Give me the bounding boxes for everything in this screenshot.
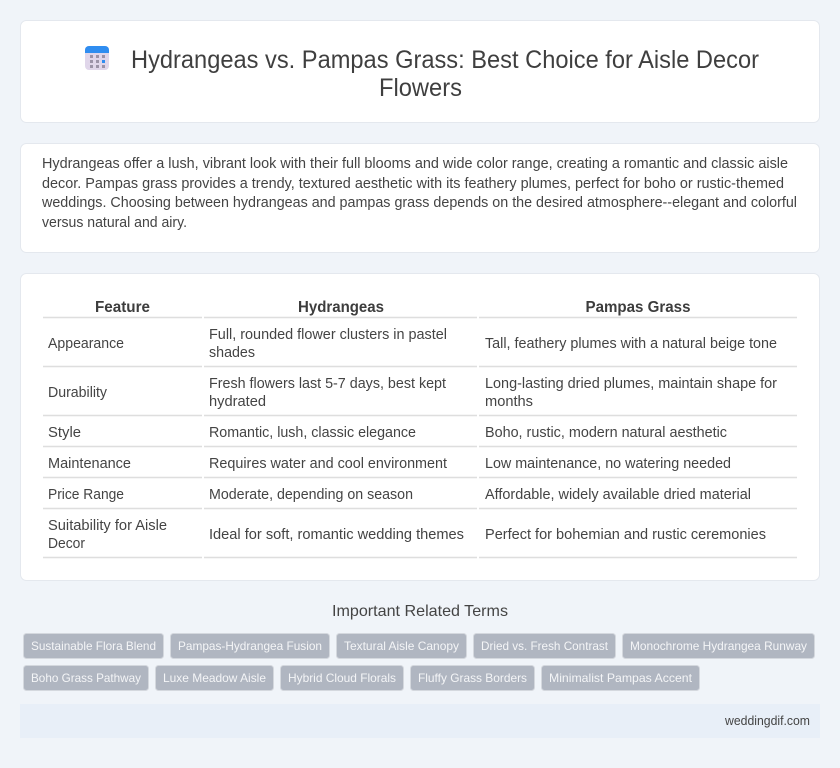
row: price range: Moderate, depending on season — [209, 487, 413, 503]
panel: comparison table — [20, 274, 820, 580]
row: durability — [48, 376, 777, 410]
text block: introduction — [41, 156, 797, 231]
row: suitability — [48, 518, 766, 552]
row: style: Style — [48, 425, 81, 441]
row: price range — [48, 487, 751, 503]
row: maintenance: Low maintenance, no watering needed — [485, 456, 731, 472]
row: durability: hydrated — [209, 394, 266, 410]
row: style: Boho, rustic, modern natural aesthetic — [485, 425, 727, 441]
related term tags: Sustainable Flora Blend — [31, 639, 156, 653]
table header row: Hydrangeas — [298, 299, 384, 316]
row: suitability: Ideal for soft, romantic wedding themes — [209, 527, 464, 543]
related term tags: Pampas-Hydrangea Fusion — [178, 639, 322, 653]
related term tags: Minimalist Pampas Accent — [549, 671, 693, 685]
row: style — [48, 425, 727, 441]
panel: header — [20, 20, 820, 122]
related term tags: Hybrid Cloud Florals — [288, 671, 396, 685]
row: appearance: Appearance — [48, 336, 124, 352]
row: appearance: Tall, feathery plumes with a natural beige tone — [485, 336, 777, 352]
row: durability: months — [485, 394, 533, 410]
row: appearance — [48, 327, 777, 361]
related term tags: Luxe Meadow Aisle — [163, 671, 266, 685]
text block: introduction: versus natural and airy. — [42, 215, 187, 231]
row: suitability: Decor — [48, 536, 85, 552]
row: suitability: Perfect for bohemian and rustic ceremonies — [485, 527, 766, 543]
text block: introduction: Hydrangeas offer a lush, vibrant look with their full blooms and wide color range, creating a romantic and classic aisle — [42, 156, 788, 172]
footer: weddingdif.com — [724, 714, 810, 728]
row: durability: Long-lasting dried plumes, maintain shape for — [485, 376, 777, 392]
icon: calendar — [85, 46, 109, 70]
row: price range: Price Range — [48, 487, 124, 503]
related term tags — [24, 634, 814, 690]
text block: introduction: weddings. Choosing between hydrangeas and pampas grass depends on the desired atmosphere--elegant and colorful — [41, 195, 797, 211]
table header row: Pampas Grass — [586, 299, 690, 316]
row: maintenance — [48, 456, 731, 472]
related term tags: Boho Grass Pathway — [31, 671, 141, 685]
row: durability: Durability — [48, 385, 108, 401]
row: appearance: shades — [209, 345, 255, 361]
footer — [20, 704, 820, 738]
table header row — [95, 299, 690, 316]
table header row: Feature — [95, 299, 150, 316]
title: Flowers — [379, 74, 462, 102]
related term tags: Fluffy Grass Borders — [418, 671, 527, 685]
heading: related terms: Important Related Terms — [332, 603, 508, 620]
row: suitability: Suitability for Aisle — [48, 518, 167, 534]
row: price range: Affordable, widely available dried material — [485, 487, 751, 503]
related term tags: Textural Aisle Canopy — [344, 639, 459, 653]
related term tags: Monochrome Hydrangea Runway — [630, 639, 807, 653]
row: durability: Fresh flowers last 5-7 days, best kept — [209, 376, 446, 392]
related term tags: Dried vs. Fresh Contrast — [481, 639, 609, 653]
row: maintenance: Maintenance — [48, 456, 131, 472]
panel: introduction — [20, 144, 820, 252]
row: maintenance: Requires water and cool environment — [209, 456, 447, 472]
row: appearance: Full, rounded flower clusters in pastel — [209, 327, 447, 343]
title — [131, 46, 759, 102]
text block: introduction: decor. Pampas grass provides a trendy, textured aesthetic with its feathery plumes, perfect for boho or rustic-themed — [42, 176, 784, 192]
title: Hydrangeas vs. Pampas Grass: Best Choice for Aisle Decor — [131, 46, 759, 74]
row: style: Romantic, lush, classic elegance — [209, 425, 416, 441]
